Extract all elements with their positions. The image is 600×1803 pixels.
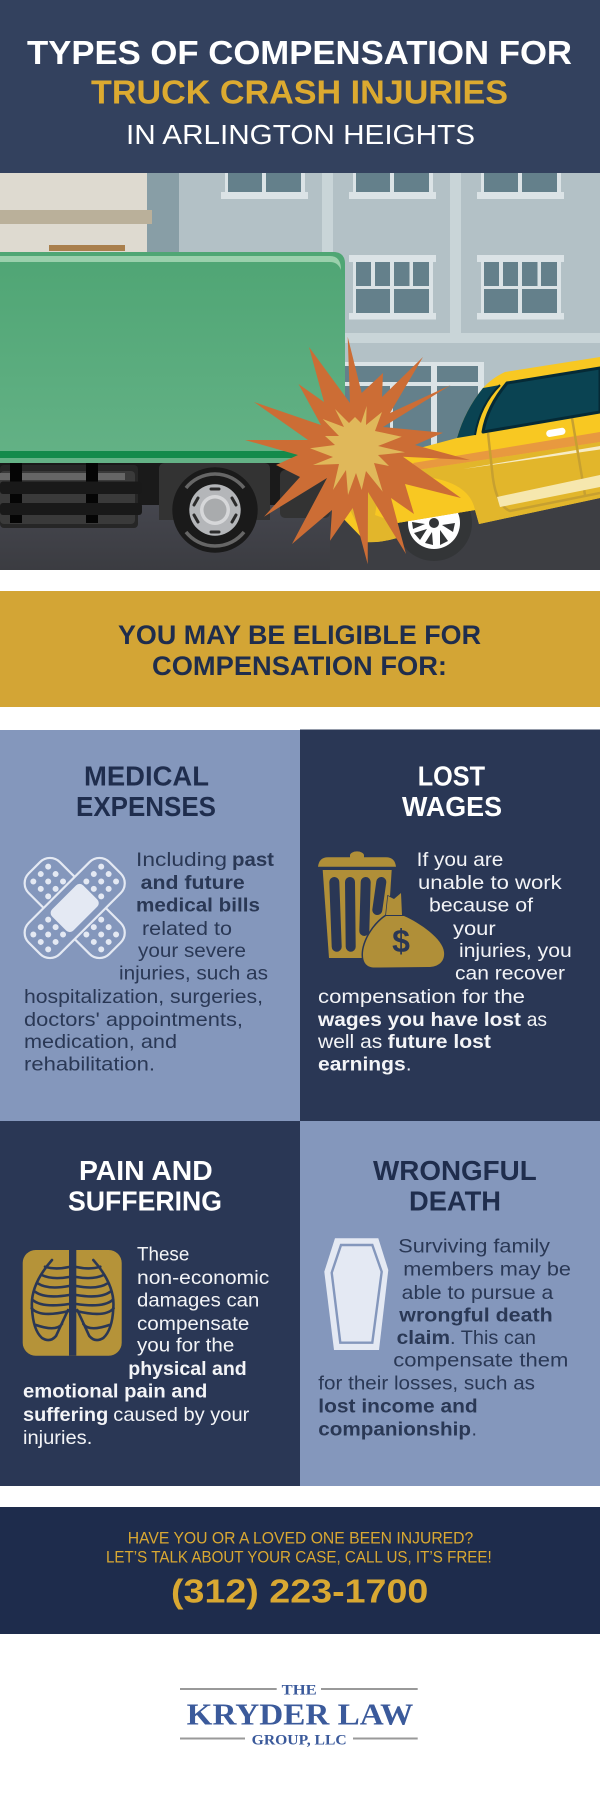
text: wrongful death body	[318, 1236, 571, 1441]
banner: you may be eligible	[0, 591, 600, 707]
text: wrongful death body: companionship	[318, 1419, 471, 1441]
text: lost wages body: compensation for the	[318, 986, 525, 1008]
icon: bandages	[19, 852, 131, 964]
door handle	[546, 427, 566, 438]
text: medical expenses body: rehabilitation.	[24, 1054, 155, 1076]
logo: the kryder law group: KRYDER LAW	[187, 1696, 413, 1731]
text: wrongful death body: .	[472, 1419, 477, 1441]
text: lost wages body: earnings	[318, 1054, 406, 1076]
text: medical expenses body: medication, and	[24, 1031, 177, 1053]
text: medical expenses body: hospitalization, surgeries,	[24, 986, 263, 1008]
text: pain and suffering body: These	[137, 1244, 189, 1266]
upper windows	[221, 173, 564, 199]
text: pain and suffering body: caused by your	[113, 1404, 250, 1426]
heading: pain and suffering: PAIN AND	[79, 1155, 213, 1186]
logo: the kryder law group: GROUP, LLC	[252, 1732, 347, 1748]
cream stripe	[497, 475, 600, 507]
white streak	[463, 446, 600, 469]
text: wrongful death body: wrongful death	[398, 1305, 553, 1327]
title line 3: IN ARLINGTON HEIGHTS	[126, 119, 475, 150]
text: pain and suffering body	[23, 1244, 270, 1449]
truck wheel	[172, 467, 258, 553]
text: lost wages body: well as	[317, 1031, 383, 1053]
title line 1: TYPES OF COMPENSATION FOR	[27, 35, 572, 72]
text: medical expenses body: medical bills	[136, 895, 260, 917]
text: wrongful death body: compensate them	[393, 1350, 568, 1372]
car body	[330, 357, 600, 542]
text: medical expenses body: past	[232, 849, 275, 871]
text: wrongful death body: members may be	[403, 1259, 571, 1281]
header panel	[0, 0, 600, 173]
heading: lost wages	[402, 761, 502, 822]
explosion	[245, 337, 470, 564]
heading: medical expenses: MEDICAL	[84, 761, 209, 792]
icon: trash can with money bag: $	[392, 923, 410, 959]
car fender	[375, 478, 475, 523]
text: lost wages body: can recover	[455, 962, 566, 984]
panel: medical expenses	[0, 730, 300, 1121]
windshield	[483, 368, 600, 432]
heading: pain and suffering: SUFFERING	[68, 1186, 222, 1217]
orange stripe	[413, 432, 600, 470]
text: lost wages body: unable to work	[418, 872, 562, 894]
icon: trash can with money bag	[318, 851, 444, 968]
call to action panel: (312) 223-1700	[171, 1573, 428, 1610]
text: pain and suffering body: suffering	[23, 1404, 108, 1426]
text: lost wages body: wages you have lost	[317, 1009, 522, 1031]
heading: wrongful death	[373, 1155, 537, 1217]
call to action panel: LET’S TALK ABOUT YOUR CASE, CALL US, IT’S FREE!	[106, 1548, 492, 1566]
heading: pain and suffering	[68, 1155, 222, 1217]
text: wrongful death body: Surviving family	[398, 1236, 550, 1258]
text: pain and suffering body: damages can	[137, 1290, 259, 1312]
text: pain and suffering body: emotional pain and	[23, 1381, 207, 1403]
text: medical expenses body: Including	[136, 849, 227, 871]
banner: you may be eligible: COMPENSATION FOR:	[152, 651, 447, 681]
text: medical expenses body: and future	[141, 872, 245, 894]
car	[330, 357, 600, 561]
middle windows	[349, 255, 564, 320]
truck	[0, 252, 345, 553]
text: pain and suffering body: injuries.	[23, 1427, 92, 1449]
text: pain and suffering body: non-economic	[137, 1267, 270, 1289]
lower window	[340, 362, 484, 507]
text: medical expenses body	[24, 849, 275, 1076]
door lines	[488, 418, 600, 511]
text: wrongful death body: for their losses, such as	[318, 1372, 535, 1394]
icon: rib cage	[23, 1250, 122, 1356]
heading: medical expenses: EXPENSES	[76, 791, 216, 822]
car wheel	[396, 485, 472, 561]
heading: wrongful death: WRONGFUL	[373, 1155, 537, 1186]
text: medical expenses body: doctors' appointments,	[24, 1009, 243, 1031]
text: pain and suffering body: physical and	[128, 1358, 247, 1380]
logo: the kryder law group	[180, 1682, 418, 1748]
panel: pain and suffering	[0, 1121, 300, 1486]
text: pain and suffering body: compensate	[137, 1313, 249, 1335]
text: medical expenses body: related to	[142, 918, 232, 940]
road	[0, 478, 600, 570]
heading: wrongful death: DEATH	[409, 1186, 501, 1217]
text: lost wages body: If you are	[417, 849, 503, 871]
text: lost wages body: your	[453, 918, 496, 940]
title line 2: TRUCK CRASH INJURIES	[91, 74, 508, 112]
text: wrongful death body: claim	[397, 1327, 450, 1349]
text: lost wages body: .	[406, 1054, 411, 1076]
panel: wrongful death	[300, 1121, 600, 1486]
car lower panel	[345, 442, 600, 542]
text: medical expenses body: your severe	[138, 940, 246, 962]
call to action panel	[0, 1507, 600, 1634]
text: pain and suffering body: you for the	[137, 1335, 234, 1357]
text: lost wages body: as	[527, 1009, 547, 1031]
text: lost wages body: future lost	[388, 1031, 492, 1053]
text: wrongful death body: able to pursue a	[402, 1282, 553, 1304]
text: wrongful death body: . This can	[450, 1327, 536, 1349]
heading: medical expenses	[76, 761, 216, 822]
text: lost wages body: injuries, you	[459, 940, 572, 962]
truck box	[0, 252, 345, 463]
logo: the kryder law group: THE	[282, 1682, 317, 1698]
text: lost wages body	[317, 849, 572, 1076]
crash scene illustration	[0, 173, 600, 570]
call to action panel: HAVE YOU OR A LOVED ONE BEEN INJURED?	[128, 1529, 473, 1547]
text: medical expenses body: injuries, such as	[119, 962, 268, 984]
icon: coffin	[324, 1238, 388, 1350]
banner: you may be eligible: YOU MAY BE ELIGIBLE FOR	[118, 620, 481, 650]
text: wrongful death body: lost income and	[318, 1396, 478, 1418]
panel: lost wages	[300, 730, 600, 1121]
side window	[457, 385, 500, 438]
heading: lost wages: LOST	[418, 761, 485, 792]
heading: lost wages: WAGES	[402, 791, 502, 822]
text: lost wages body: because of	[429, 895, 534, 917]
